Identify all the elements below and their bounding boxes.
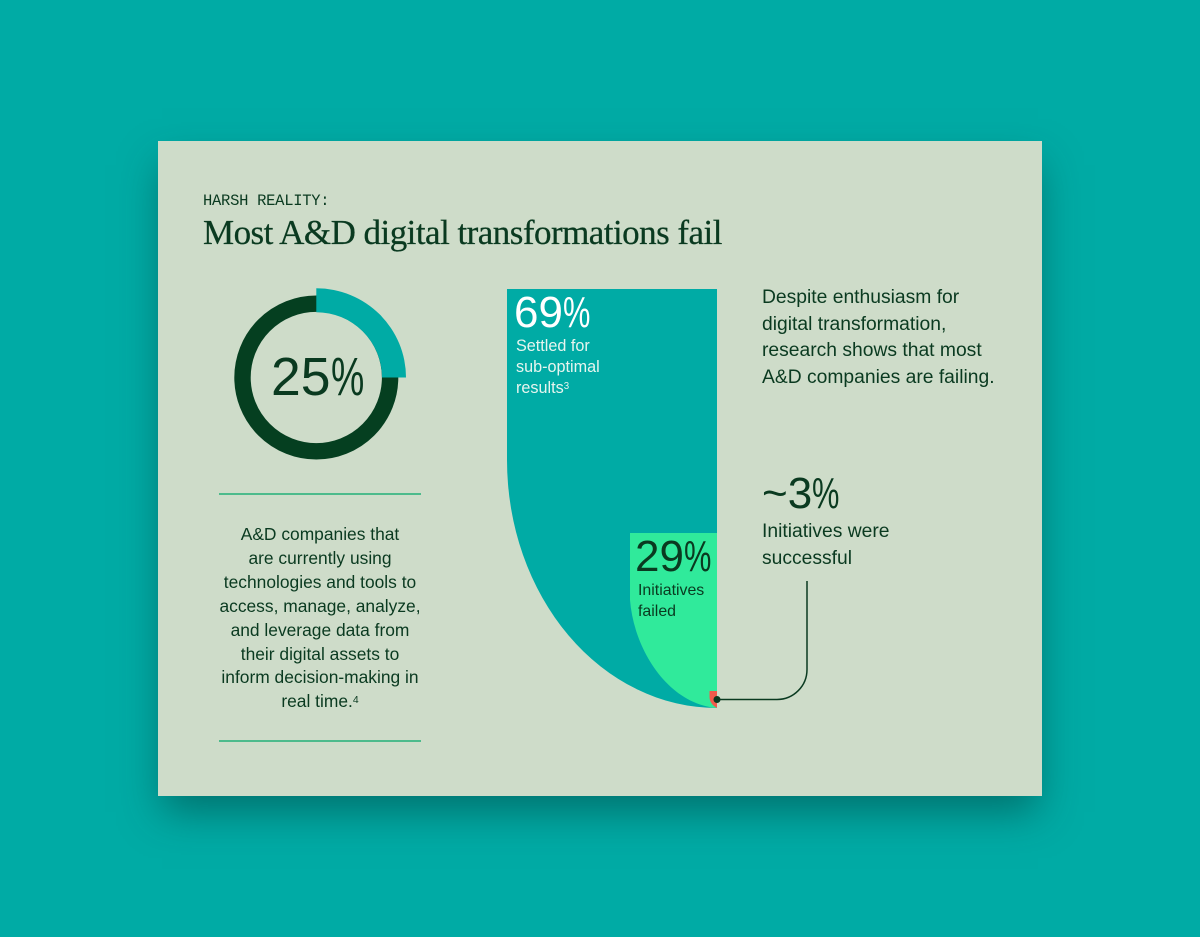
text block: A&D companies: their digital assets to bbox=[241, 644, 399, 664]
text block: A&D companies bbox=[219, 524, 421, 711]
stat: 29% bbox=[635, 532, 711, 581]
text block: A&D companies: A&D companies that bbox=[241, 524, 399, 544]
text block: A&D companies: and leverage data from bbox=[231, 620, 409, 640]
text block: A&D companies: are currently using bbox=[248, 548, 392, 568]
label: settled: results3 bbox=[516, 379, 569, 397]
eyebrow label: HARSH REALITY: bbox=[203, 192, 329, 210]
connector line bbox=[717, 581, 807, 700]
stat: ~3% bbox=[762, 469, 840, 518]
stat: ~3%: ~3 bbox=[762, 469, 812, 518]
label: successful: Initiatives were bbox=[762, 521, 890, 542]
shape: 29% failed bbox=[630, 533, 717, 708]
stat: 69%: 69 bbox=[514, 288, 563, 337]
text block: enthusiasm: A&D companies are failing. bbox=[762, 366, 995, 388]
label: failed bbox=[638, 582, 704, 620]
label: settled bbox=[516, 337, 600, 397]
stat: 29%: 29 bbox=[635, 532, 684, 581]
label: failed: Initiatives bbox=[638, 582, 704, 599]
label: settled: Settled for bbox=[516, 337, 590, 355]
text block: A&D companies: inform decision-making in bbox=[221, 667, 419, 687]
text block: enthusiasm bbox=[762, 287, 995, 388]
label: successful: successful bbox=[762, 548, 852, 568]
label: failed: failed bbox=[638, 603, 676, 620]
text block: A&D companies: real time.4 bbox=[281, 691, 359, 711]
text block: enthusiasm: Despite enthusiasm for bbox=[762, 287, 959, 308]
text block: enthusiasm: digital transformation, bbox=[762, 314, 946, 334]
donut value: 25 bbox=[271, 348, 331, 407]
label: successful bbox=[762, 521, 890, 568]
text block: A&D companies: access, manage, analyze, bbox=[219, 596, 421, 616]
donut value bbox=[271, 348, 364, 407]
stat: 69%: % bbox=[563, 288, 590, 337]
shape: 69% settled bbox=[507, 289, 717, 708]
divider top bbox=[219, 493, 421, 494]
text block: A&D companies: technologies and tools to bbox=[224, 572, 416, 592]
connector dot bbox=[714, 696, 720, 703]
divider bottom bbox=[219, 740, 421, 742]
label: settled: sub-optimal bbox=[516, 358, 600, 376]
stat: 69% bbox=[514, 288, 590, 337]
shape: 3% successful bbox=[710, 691, 717, 708]
donut value: % bbox=[331, 348, 364, 407]
stat: ~3%: % bbox=[812, 469, 840, 518]
title: Most A&D digital transformations fail bbox=[203, 213, 722, 252]
text block: enthusiasm: research shows that most bbox=[762, 340, 982, 361]
stat: 29%: % bbox=[684, 532, 711, 581]
panel: card bbox=[158, 141, 1042, 796]
